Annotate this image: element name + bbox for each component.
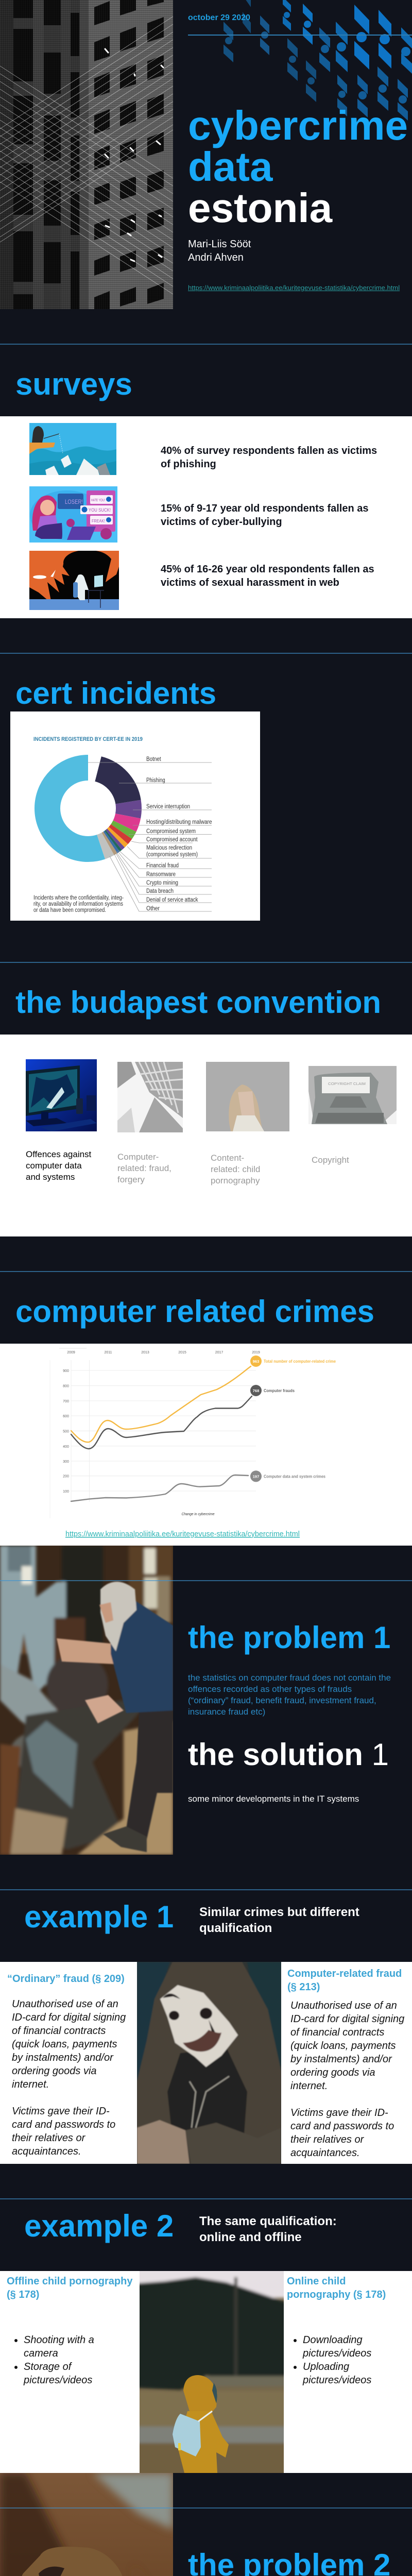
chart: incidents donut: Financial fraud	[146, 862, 179, 869]
heading: ordinary fraud: “Ordinary” fraud (§ 209)	[7, 1973, 125, 1985]
list: online: Downloading	[303, 2334, 363, 2346]
subtitle: example 1: qualification	[199, 1921, 272, 1935]
text: computer-related fraud	[290, 2000, 405, 2159]
chart: incidents donut: Hosting/distributing malware	[146, 819, 212, 825]
divider computer crimes	[0, 1271, 412, 1272]
chart: change in cybercrime: Total number of computer-related crime	[264, 1359, 336, 1364]
label: content-related: Content-	[211, 1153, 244, 1163]
image: cyber-bullying: YOU SUCK!	[89, 507, 111, 513]
text: ordinary fraud: card and passwords to	[12, 2119, 115, 2130]
chart: incidents donut: (compromised system)	[146, 852, 198, 858]
text: computer-related fraud: acquaintances.	[290, 2147, 360, 2159]
label: content-related: related: child	[211, 1164, 260, 1174]
list: offline: Shooting with a	[24, 2334, 94, 2346]
label: computer-related	[117, 1152, 171, 1184]
image: online harassment	[29, 551, 119, 610]
panel: example 2 comparison	[0, 2271, 412, 2473]
subtitle: example 2: online and offline	[199, 2230, 302, 2244]
text: phishing: of phishing	[161, 459, 216, 470]
list: online	[294, 2334, 371, 2386]
text: sexual harassment: victims of sexual harassment in web	[161, 577, 339, 588]
image: computer monitor	[26, 1059, 97, 1131]
list: offline	[14, 2334, 94, 2386]
heading: online	[287, 2276, 386, 2300]
text: computer-related fraud: card and passwords to	[290, 2121, 394, 2132]
image: cyber-bullying: HATE YOU!	[91, 499, 105, 502]
text: phishing: 40% of survey respondents fallen as victims	[161, 445, 377, 456]
heading: computer-related fraud: (§ 213)	[287, 1981, 320, 1993]
chart: change in cybercrime: 700	[63, 1400, 69, 1403]
chart: incidents donut: Incidents where the confidentiality, integ-	[33, 895, 124, 901]
divider problem 1	[0, 1580, 412, 1581]
panel: problem and solution 1	[0, 1546, 391, 1855]
heading: computer related crimes: computer related crimes	[15, 1294, 374, 1329]
text: sexual harassment	[161, 564, 374, 588]
chart: change in cybercrime: 100	[63, 1490, 69, 1494]
text: computer-related fraud: of financial contracts	[290, 2027, 384, 2038]
divider cert	[0, 653, 412, 654]
text: computer-related fraud: (quick loans, payments	[290, 2040, 396, 2052]
text: cyber-bullying: 15% of 9-17 year old respondents fallen as	[161, 503, 368, 514]
text: cyber-bullying: victims of cyber-bullying	[161, 516, 282, 528]
chart: incidents donut: Ransomware	[146, 872, 176, 878]
heading: computer-related fraud	[287, 1968, 402, 1993]
title: cybercrime	[188, 103, 408, 148]
panel: budapest convention	[0, 1035, 412, 1236]
chart: change in cybercrime: 768	[253, 1388, 259, 1393]
list: offline: camera	[24, 2348, 58, 2359]
chart: incidents donut: Service interruption	[146, 804, 190, 810]
panel: cover	[0, 0, 412, 309]
text: problem 1: offences recorded as other types of frauds	[188, 1684, 352, 1694]
heading: example 2: example 2	[24, 2209, 174, 2243]
chart: incidents donut: Crypto mining	[146, 880, 178, 886]
chart: change in cybercrime: Computer data and system crimes	[264, 1473, 325, 1479]
heading: the problem 1: the problem 1	[188, 1620, 390, 1655]
chart: change in cybercrime: 2009	[67, 1351, 75, 1354]
chart: change in cybercrime: 200	[63, 1475, 69, 1479]
chart: change in cybercrime: 600	[63, 1415, 69, 1418]
text: computer-related fraud: Victims gave their ID-	[290, 2107, 388, 2119]
image: cyber-bullying	[29, 486, 117, 543]
date: october 29 2020	[188, 13, 250, 22]
text: ordinary fraud: internet.	[12, 2079, 49, 2090]
label: offences	[26, 1149, 92, 1182]
text: computer-related fraud: their relatives or	[290, 2134, 364, 2145]
photo: man operating machine	[0, 1546, 173, 1855]
image: girl covering face faded	[206, 1062, 289, 1131]
heading: offline: Offline child pornography	[7, 2276, 132, 2287]
divider example 2	[0, 2198, 412, 2199]
authors	[188, 239, 251, 263]
divider example 1	[0, 1889, 412, 1890]
text: computer-related fraud: Unauthorised use of an	[290, 2000, 397, 2011]
label: offences: and systems	[26, 1172, 75, 1182]
list: online: Uploading	[303, 2361, 349, 2372]
chart: incidents donut: Compromised account	[146, 837, 198, 843]
heading: the solution 1: the solution 1	[188, 1737, 389, 1772]
chart: change in cybercrime: 963	[253, 1359, 259, 1364]
list: offline: pictures/videos	[24, 2375, 92, 2386]
heading: offline: (§ 178)	[7, 2289, 39, 2300]
text: problem 1: insurance fraud etc)	[188, 1707, 265, 1717]
heading: the budapest convention: the budapest convention	[15, 985, 381, 1020]
chart: incidents donut: INCIDENTS REGISTERED BY CERT-EE IN 2019	[33, 736, 143, 742]
image: skyscrapers faded	[117, 1062, 183, 1132]
chart: change in cybercrime: Change in cybercrime	[181, 1512, 214, 1516]
image: phishing	[29, 423, 116, 475]
text: phishing	[161, 445, 377, 470]
text: ordinary fraud: Unauthorised use of an	[12, 1998, 118, 2010]
label: computer-related: related: fraud,	[117, 1163, 171, 1173]
chart: change in cybercrime: 2017	[215, 1351, 223, 1354]
text: solution 1: some minor developments in the IT systems	[188, 1794, 359, 1804]
chart: incidents donut: Other	[146, 906, 160, 912]
heading: online: Online child	[287, 2276, 346, 2287]
image: cyber-bullying: LOSER!	[65, 498, 83, 505]
heading: example 1: example 1	[24, 1900, 174, 1934]
chart: incidents donut: Phishing	[146, 777, 165, 784]
chart: change in cybercrime: Computer frauds	[264, 1388, 295, 1393]
chart: change in cybercrime: 500	[63, 1430, 69, 1433]
authors: Mari-Liis Sööt	[188, 239, 251, 250]
divider budapest	[0, 962, 412, 963]
chart: change in cybercrime: 2019	[252, 1351, 260, 1354]
chart: change in cybercrime: 2013	[141, 1351, 149, 1354]
chart: change in cybercrime: 300	[63, 1460, 69, 1464]
image: copyright typewriter faded: COPYRIGHT CLAIM	[328, 1082, 366, 1086]
authors: Andri Ahven	[188, 252, 244, 263]
panel: example 1 comparison	[0, 1962, 412, 2164]
chart: incidents donut: Compromised system	[146, 828, 196, 835]
label: copyright: Copyright	[312, 1155, 349, 1165]
chart: incidents donut: Malicious redirection	[146, 845, 192, 851]
photo: masked hooded man	[137, 1962, 281, 2164]
list: online: pictures/videos	[303, 2375, 371, 2386]
label: offences: computer data	[26, 1161, 82, 1171]
label: computer-related: Computer-	[117, 1152, 159, 1162]
heading: cert incidents: cert incidents	[15, 676, 216, 710]
text: ordinary fraud: Victims gave their ID-	[12, 2106, 110, 2117]
list: online: pictures/videos	[303, 2348, 371, 2359]
chart: change in cybercrime: 900	[63, 1369, 69, 1373]
divider surveys	[0, 344, 412, 345]
heading: computer-related fraud: Computer-related fraud	[287, 1968, 402, 1979]
text: sexual harassment: 45% of 16-26 year old respondents fallen as	[161, 564, 374, 575]
title: data	[188, 144, 273, 190]
chart: change in cybercrime: 800	[63, 1385, 69, 1388]
text: ordinary fraud	[12, 1998, 126, 2157]
text: computer-related fraud: ID-card for digital signing	[290, 2013, 404, 2025]
chart: incidents donut: Botnet	[146, 756, 161, 762]
decorative blue ribbon pattern	[224, 0, 412, 121]
text: ordinary fraud: of financial contracts	[12, 2025, 106, 2037]
label: computer-related: forgery	[117, 1175, 145, 1184]
text: ordinary fraud: their relatives or	[12, 2132, 85, 2144]
panel: problem and solution 2	[0, 2473, 390, 2576]
image: cyber-bullying: FREAK!	[92, 519, 105, 523]
label: offences: Offences against	[26, 1149, 91, 1159]
panel: surveys	[0, 416, 412, 618]
panel: line chart	[0, 1344, 412, 1546]
chart: change in cybercrime: 400	[63, 1445, 69, 1449]
photo: child with backpack	[140, 2271, 284, 2473]
heading: surveys: surveys	[15, 367, 132, 401]
text: ordinary fraud: ordering goods via	[12, 2065, 97, 2077]
subtitle: example 2	[199, 2214, 337, 2244]
chart: change in cybercrime: 197	[253, 1474, 259, 1479]
photo: cookie on milk glass	[0, 2473, 173, 2576]
subtitle: example 1	[199, 1905, 359, 1935]
chart: incidents donut: rity, or availability of information systems	[33, 901, 123, 907]
image: copyright typewriter faded	[308, 1066, 397, 1124]
divider problem 2	[0, 2507, 412, 2509]
text: cyber-bullying	[161, 503, 368, 528]
text: ordinary fraud: by instalments) and/or	[12, 2052, 113, 2063]
label: content-related: pornography	[211, 1176, 260, 1185]
text: problem 1	[188, 1673, 391, 1717]
text: problem 1: the statistics on computer fraud does not contain the	[188, 1673, 391, 1683]
chart: incidents donut: Denial of service attack	[146, 897, 198, 903]
chart: change in cybercrime: 2015	[178, 1351, 186, 1354]
list: offline: Storage of	[24, 2361, 71, 2372]
text: computer-related fraud: internet.	[290, 2080, 328, 2092]
chart: change in cybercrime	[49, 1348, 336, 1538]
text: ordinary fraud: (quick loans, payments	[12, 2039, 117, 2050]
subtitle: example 2: The same qualification:	[199, 2214, 337, 2228]
title	[188, 103, 408, 231]
chart: incidents donut: Data breach	[146, 888, 174, 894]
text: computer-related fraud: by instalments) and/or	[290, 2054, 392, 2065]
photo: office building with lattice overlay	[0, 0, 173, 309]
chart: incidents donut	[10, 711, 260, 921]
heading: offline	[7, 2276, 133, 2300]
heading: online: pornography (§ 178)	[287, 2289, 386, 2300]
source link: https://www.kriminaalpoliitika.ee/kuritegevuse-statistika/cybercrime.html	[188, 284, 400, 292]
text: ordinary fraud: acquaintances.	[12, 2146, 81, 2157]
title: estonia	[188, 185, 332, 231]
text: ordinary fraud: ID-card for digital signing	[12, 2012, 126, 2023]
chart: change in cybercrime: 2011	[104, 1351, 112, 1354]
text: problem 1: (“ordinary” fraud, benefit fraud, investment fraud,	[188, 1696, 376, 1705]
chart: change in cybercrime: https://www.kriminaalpoliitika.ee/kuritegevuse-statistika/cybercrime.html	[65, 1530, 300, 1538]
label: content-related	[211, 1153, 260, 1185]
chart: incidents donut: or data have been compromised.	[33, 907, 106, 913]
subtitle: example 1: Similar crimes but different	[199, 1905, 359, 1919]
text: computer-related fraud: ordering goods via	[290, 2067, 375, 2078]
